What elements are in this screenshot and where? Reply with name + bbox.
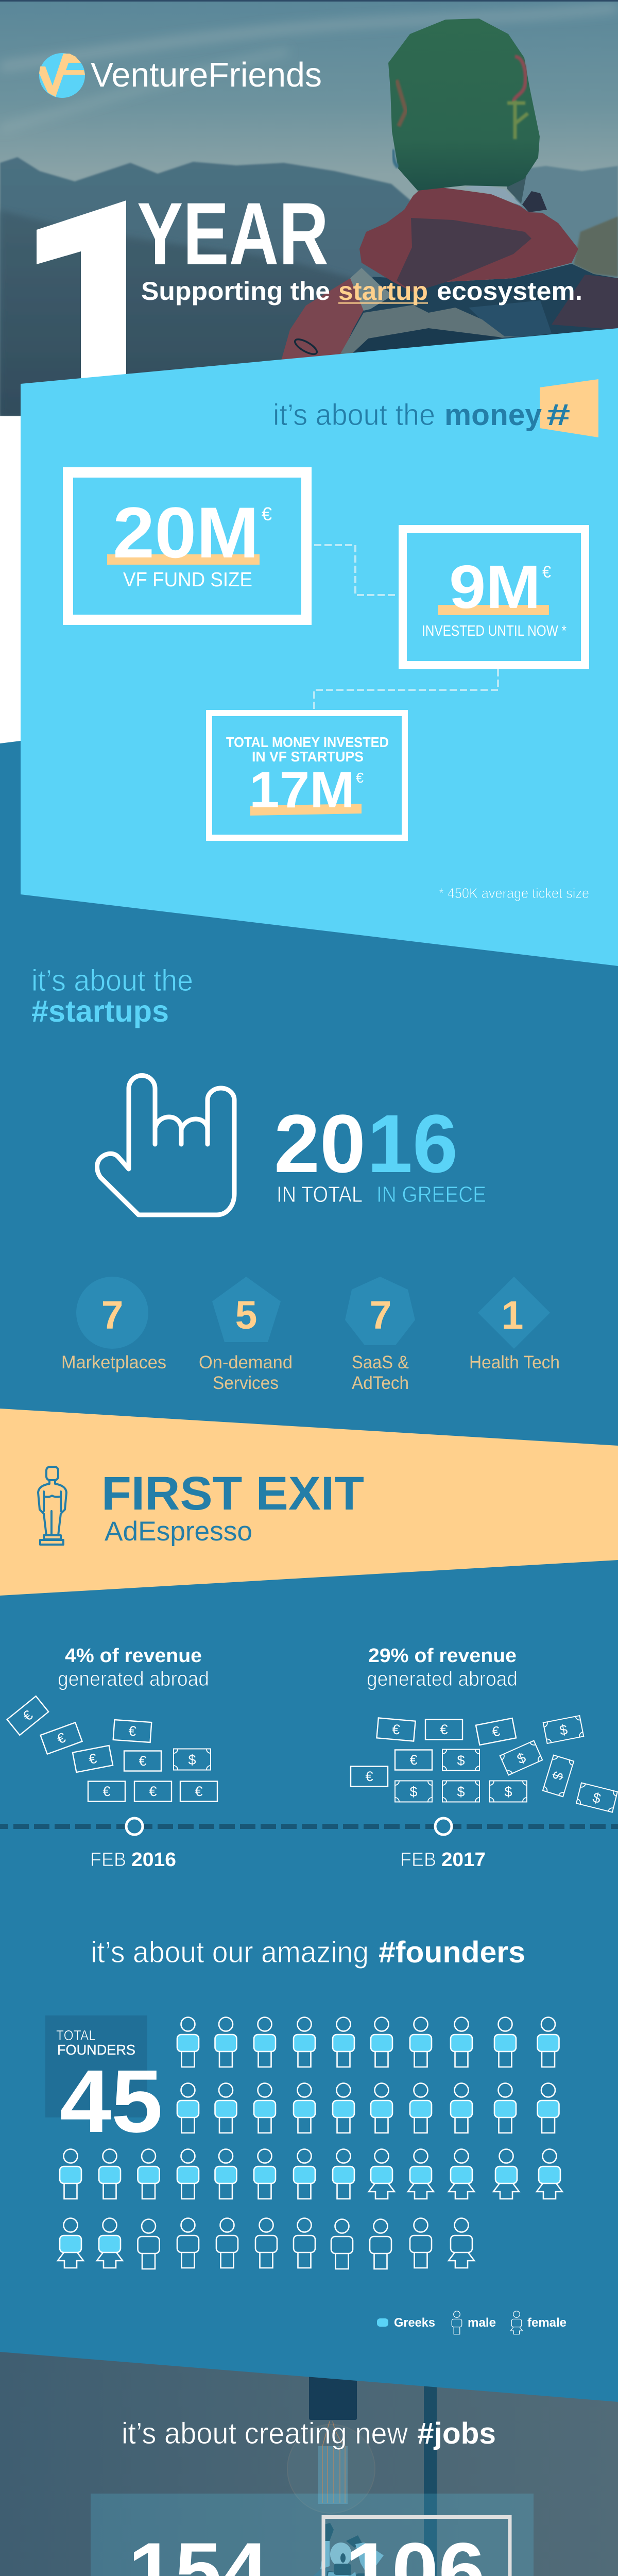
money bills: Feb 2017: €: [409, 1752, 418, 1768]
box: total money invested: €: [356, 770, 364, 786]
heading: founders: it’s about our amazing: [91, 1936, 369, 1969]
heading: money: #: [546, 398, 570, 432]
box: invested until now: [403, 529, 585, 665]
category: health tech: Health Tech: [469, 1352, 560, 1372]
total founders box: [45, 2015, 163, 2151]
hero big numeral 1: [37, 200, 126, 392]
money bills: Feb 2016: €: [88, 1751, 98, 1767]
money bills: Feb 2017: €: [391, 1721, 401, 1738]
box: fund size: €: [262, 503, 272, 524]
category: health tech: 1: [502, 1293, 523, 1337]
money bills: Feb 2017: €: [365, 1769, 373, 1784]
category: saas and adtech: AdTech: [352, 1373, 409, 1393]
white strip at page left: [0, 416, 21, 743]
title first exit: AdEspresso: [105, 1516, 252, 1547]
caption: 4% of revenue: [58, 1645, 209, 1690]
stat: 2016 in total in Greece: 16: [367, 1097, 458, 1190]
date label feb 2016: [90, 1849, 176, 1871]
money bills: Feb 2016: €: [195, 1784, 203, 1799]
title first exit: FIRST EXIT: [101, 1467, 364, 1520]
box: fund size: 20M: [113, 492, 259, 573]
heading: money: money: [444, 398, 542, 432]
legend: Greeks: [394, 2316, 435, 2330]
category: marketplaces: [61, 1277, 166, 1372]
caption: 29% of revenue: generated abroad: [367, 1668, 518, 1690]
jobs photo: bulb and stormtrooper: [0, 2349, 618, 2576]
stat: 2016 in total in Greece: [274, 1097, 486, 1207]
icon: oscar trophy: [38, 1467, 66, 1545]
money bills: Feb 2016: €: [55, 1730, 67, 1747]
category: marketplaces: Marketplaces: [61, 1352, 166, 1372]
hero photo: hiker looking at mountains: [0, 0, 618, 416]
category: saas and adtech: 7: [370, 1293, 391, 1337]
band: first exit: [0, 1409, 618, 1596]
date label feb 2017: 2017: [441, 1849, 486, 1871]
money bills: Feb 2017: $: [550, 1770, 566, 1782]
panel: it's about the money: [21, 328, 618, 966]
hero title YEAR: YEAR: [137, 184, 329, 283]
box: total money invested: 17M: [249, 761, 355, 818]
box: fund size: VF FUND SIZE: [123, 569, 252, 591]
heading: founders: #founders: [379, 1936, 525, 1969]
category: marketplaces: 7: [101, 1293, 123, 1337]
category: on-demand services: On-demand: [199, 1352, 293, 1372]
hero logo: [39, 53, 322, 98]
heading: jobs: it’s about creating new: [122, 2417, 408, 2450]
money bills: Feb 2017: $: [591, 1790, 603, 1806]
hero logo: VentureFriends: [91, 56, 322, 94]
caption: 4% of revenue: 4% of revenue: [65, 1645, 202, 1667]
money bills: Feb 2016: €: [128, 1723, 137, 1739]
jobs translucent panel: [91, 2494, 534, 2576]
date label feb 2017: [400, 1849, 486, 1871]
box: invested until now: INVESTED UNTIL NOW *: [422, 623, 566, 639]
box: total money invested: IN VF STARTUPS: [252, 749, 364, 765]
category: on-demand services: Services: [213, 1373, 279, 1393]
money bills: Feb 2016: [7, 1696, 217, 1801]
footnote: * 450K average ticket size: [439, 885, 589, 901]
heading: money: [273, 398, 570, 432]
stat: 2016 in total in Greece: IN TOTAL: [277, 1182, 363, 1207]
founders pictogram grid: [58, 2018, 562, 2269]
money bills: Feb 2016: €: [139, 1753, 147, 1769]
hero subtitle: Supporting the: [141, 277, 330, 306]
money bills: Feb 2017: [351, 1716, 617, 1812]
legend: [377, 2311, 566, 2334]
stat: 2016 in total in Greece: 20: [274, 1097, 366, 1190]
timeline: [0, 1818, 618, 1835]
caption: 4% of revenue: generated abroad: [58, 1668, 209, 1690]
total founders box: FOUNDERS: [57, 2042, 135, 2058]
money bills: Feb 2016: $: [188, 1752, 196, 1768]
category: saas and adtech: [345, 1277, 415, 1393]
date label feb 2016: FEB: [90, 1849, 126, 1871]
money bills: Feb 2017: $: [457, 1753, 465, 1768]
heading: startups: [31, 964, 193, 1028]
total founders box: TOTAL: [56, 2027, 96, 2043]
money bills: Feb 2016: €: [102, 1784, 111, 1799]
money bills: Feb 2017: €: [491, 1723, 501, 1740]
heading: startups: #startups: [31, 994, 169, 1028]
category: on-demand services: 5: [235, 1293, 257, 1337]
heading: startups: it’s about the: [31, 964, 193, 997]
heading: money: it’s about the: [273, 398, 435, 432]
legend: male: [468, 2316, 496, 2330]
heading: jobs: #jobs: [417, 2417, 496, 2450]
money bills: Feb 2017: $: [409, 1784, 418, 1800]
hero subtitle: startup: [338, 277, 428, 306]
total founders box: 45: [60, 2051, 163, 2151]
box: total money invested: TOTAL MONEY INVESTED: [226, 734, 389, 750]
box: invested until now: €: [542, 563, 551, 581]
orange flag behind hash: [540, 379, 598, 437]
caption: 29% of revenue: [367, 1645, 518, 1690]
greece highlight box: [323, 2517, 510, 2576]
category: saas and adtech: SaaS &: [352, 1352, 409, 1372]
date label feb 2017: FEB: [400, 1849, 436, 1871]
heading: founders: [91, 1936, 525, 1969]
connector dashed lines: [314, 545, 498, 716]
money bills: Feb 2017: $: [514, 1750, 528, 1767]
money bills: Feb 2017: $: [504, 1784, 512, 1800]
legend: female: [527, 2316, 566, 2330]
stat: 2016 in total in Greece: IN GREECE: [376, 1182, 486, 1207]
money bills: Feb 2017: $: [558, 1722, 569, 1738]
caption: 29% of revenue: 29% of revenue: [368, 1645, 517, 1667]
box: invested until now: 9M: [449, 553, 541, 621]
category: health tech: [469, 1277, 560, 1372]
money bills: Feb 2016: €: [149, 1784, 157, 1799]
date label feb 2016: 2016: [131, 1849, 176, 1871]
box: total money invested: [209, 713, 405, 838]
icon: rock hand: [97, 1076, 234, 1215]
hero subtitle: [141, 277, 582, 306]
title first exit: [101, 1467, 364, 1547]
money bills: Feb 2017: €: [440, 1722, 448, 1737]
money bills: Feb 2017: $: [457, 1784, 465, 1800]
box: fund size: [68, 472, 306, 620]
hero subtitle: ecosystem.: [437, 277, 582, 306]
category: on-demand services: [199, 1277, 293, 1393]
money bills: Feb 2016: €: [20, 1707, 36, 1724]
